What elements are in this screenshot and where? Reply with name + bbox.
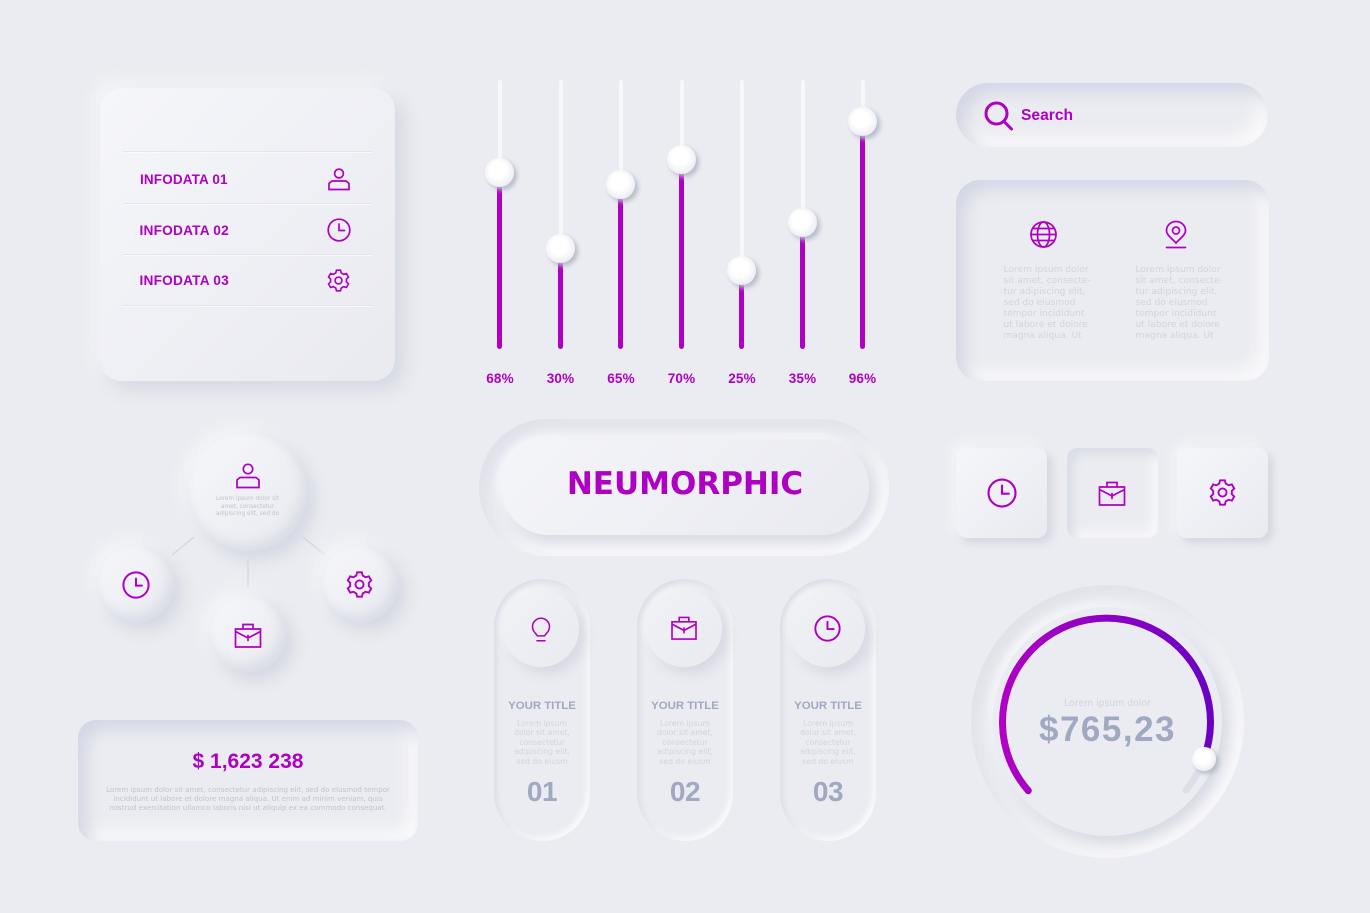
slider: 25%: [727, 80, 761, 386]
gauge: [971, 585, 1244, 858]
node text: amet, consectetur: [221, 504, 274, 510]
card text: dolor sit amet,: [657, 728, 713, 737]
node: main circle: [188, 432, 307, 551]
icon: briefcase: [671, 616, 697, 640]
card text: sed do eiusm: [802, 757, 854, 766]
button: gear: [1177, 448, 1268, 538]
text: right column: Lorem ipsum dolor: [1136, 264, 1221, 274]
card text: consectetur: [805, 738, 851, 747]
text: left column: [1004, 264, 1091, 340]
slider: 70%: [667, 80, 701, 386]
text: right column: tempor incididunt: [1136, 308, 1216, 318]
card title: YOUR TITLE: [508, 700, 576, 712]
card: step 01: [494, 579, 590, 841]
gauge arc: [999, 614, 1214, 794]
card text: adipiscing elit,: [800, 747, 856, 756]
description: Lorem ipsum dolor sit amet, consectetur adipiscing elit, sed do eiusmod tempor: [106, 784, 390, 794]
slider: 35%: [788, 80, 822, 386]
text: right column: sed do eiusmod: [1136, 298, 1208, 308]
text: left column: tempor incididunt: [1004, 308, 1084, 318]
icon: bulb: [532, 618, 550, 642]
label: infodata 03: INFODATA 03: [140, 273, 229, 288]
label: infodata 01: INFODATA 01: [140, 172, 228, 187]
slider: 30%: 30%: [547, 371, 574, 386]
title button: [501, 439, 869, 535]
card text: dolor sit amet,: [800, 728, 856, 737]
card: step 03: [780, 579, 876, 841]
node text: [216, 496, 279, 517]
card text: consectetur: [662, 738, 708, 747]
gauge knob: [1192, 747, 1216, 771]
card text: consectetur: [519, 738, 565, 747]
icon circle: briefcase: [646, 590, 722, 667]
title: NEUMORPHIC: [567, 466, 803, 502]
search label: Search: [1021, 106, 1073, 124]
icon: briefcase: [1098, 482, 1126, 506]
icon: clock: [814, 615, 841, 642]
card text: [514, 719, 570, 766]
text: right column: [1136, 264, 1223, 340]
connector lines: [172, 536, 324, 589]
label: infodata 02: INFODATA 02: [140, 223, 229, 238]
icon: gear: [346, 571, 372, 598]
icon: clock: [122, 571, 150, 599]
card number: 03: [813, 776, 843, 807]
slider: 96%: 96%: [849, 371, 876, 386]
card text: Lorem ipsum: [517, 719, 567, 728]
slider: 68%: [485, 80, 519, 386]
icon circle: clock: [789, 590, 865, 667]
card text: sed do eiusm: [516, 757, 568, 766]
card: step 02: [637, 579, 733, 841]
card text: Lorem ipsum: [660, 719, 710, 728]
node: briefcase: [209, 595, 286, 672]
icon: clock: [987, 478, 1017, 508]
description: [106, 784, 390, 812]
description: incididunt ut labore et dolore magna aliqua. Ut enim ad minim veniam, quis: [113, 794, 383, 802]
card title: YOUR TITLE: [794, 700, 862, 712]
text: left column: tur adipiscing elit,: [1004, 286, 1085, 296]
text: left column: ut labore et dolore: [1004, 320, 1088, 330]
card text: [657, 719, 713, 766]
icon: clock: [327, 218, 351, 242]
text: right column: magna aliqua. Ut: [1136, 330, 1214, 340]
card text: Lorem ipsum: [803, 719, 853, 728]
text: right column: ut labore et dolore: [1136, 320, 1220, 330]
icon circle: bulb: [503, 590, 579, 667]
amount: $ 1,623 238: [193, 750, 303, 773]
text: right column: tur adipiscing elit,: [1136, 286, 1217, 296]
text: right column: sit amet, consecte-: [1136, 276, 1223, 286]
text: left column: magna aliqua. Ut: [1004, 330, 1082, 340]
text: left column: Lorem ipsum dolor: [1004, 264, 1089, 274]
slider: 68%: 68%: [486, 371, 514, 386]
icon: person: [236, 464, 260, 488]
gauge value: $765,23: [1039, 710, 1176, 749]
icon: person: [328, 168, 350, 190]
icon: magnifier: [984, 102, 1014, 131]
node: clock: [97, 545, 174, 622]
gauge dial: [993, 607, 1222, 836]
title pill: [479, 419, 889, 556]
card title: YOUR TITLE: [651, 700, 719, 712]
slider: 30%: [546, 80, 580, 386]
card text: adipiscing elit,: [514, 747, 570, 756]
card number: 01: [527, 776, 557, 807]
button: clock: [956, 448, 1047, 538]
chart: vertical sliders: [485, 80, 882, 386]
slider: 25%: 25%: [728, 371, 756, 386]
card text: adipiscing elit,: [657, 747, 713, 756]
node text: Lorem ipsum dolor sit: [216, 496, 279, 502]
slider: 70%: 70%: [668, 371, 695, 386]
gauge caption: Lorem ipsum dolor: [1064, 698, 1151, 709]
slider: 65%: [606, 80, 640, 386]
panel: infodata list: [100, 88, 395, 381]
description: nostrud exercitation ullamco laboris nisi ut aliquip ex ea commodo consequat.: [109, 802, 387, 812]
icon: globe: [1030, 221, 1057, 248]
card text: dolor sit amet,: [514, 728, 570, 737]
panel: total amount: [78, 720, 418, 841]
icon: gear: [1210, 479, 1236, 506]
slider: 65%: 65%: [607, 371, 635, 386]
panel: globe and location: [956, 180, 1269, 381]
card text: sed do eiusm: [659, 757, 711, 766]
slider: 35%: 35%: [789, 371, 816, 386]
icon: gear: [328, 269, 350, 292]
icon: briefcase: [234, 624, 262, 648]
text: left column: sit amet, consecte-: [1004, 276, 1091, 286]
card number: 02: [670, 776, 700, 807]
slider: 96%: [848, 80, 882, 386]
node text: adipiscing elit, sed do: [216, 511, 279, 517]
search bar: [956, 83, 1268, 147]
text: left column: sed do eiusmod: [1004, 298, 1076, 308]
card text: [800, 719, 856, 766]
icon: location pin: [1166, 220, 1186, 248]
button: briefcase (pressed): [1067, 448, 1158, 538]
node: gear: [321, 545, 398, 622]
